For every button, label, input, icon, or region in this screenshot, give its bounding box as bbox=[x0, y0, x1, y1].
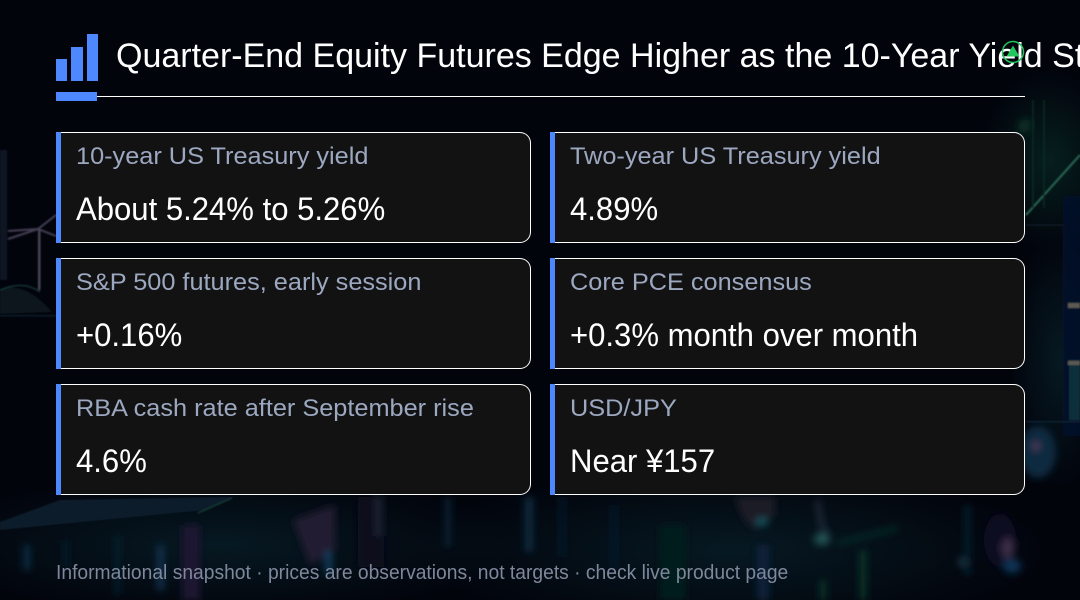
icon: green up triangle badge bbox=[1002, 40, 1024, 64]
roof lower left bbox=[0, 497, 232, 530]
panel: S&P 500 futures: S&P 500 futures, early session bbox=[76, 269, 421, 296]
panel: RBA cash rate: 4.6% bbox=[76, 443, 147, 479]
panel: Two-year US Treasury yield bbox=[550, 132, 1025, 243]
panel: RBA cash rate bbox=[56, 384, 531, 495]
right scene bbox=[1026, 155, 1080, 215]
panel: S&P 500 futures: +0.16% bbox=[76, 317, 182, 353]
panel: 10-year US Treasury yield bbox=[56, 132, 531, 243]
panel: USD/JPY: Near ¥157 bbox=[570, 443, 715, 479]
footer note: Informational snapshot · prices are observations, not targets · check live product page bbox=[56, 562, 788, 584]
panel: Core PCE consensus: +0.3% month over month bbox=[570, 317, 918, 353]
panel: RBA cash rate: RBA cash rate after September rise bbox=[76, 395, 474, 422]
panel: Two-year US Treasury yield: Two-year US Treasury yield bbox=[570, 143, 881, 170]
panel: Two-year US Treasury yield: 4.89% bbox=[570, 191, 658, 227]
left scene bbox=[0, 150, 7, 280]
panel: USD/JPY: USD/JPY bbox=[570, 395, 677, 422]
panel: USD/JPY bbox=[550, 384, 1025, 495]
panel: 10-year US Treasury yield: 10-year US Treasury yield bbox=[76, 143, 368, 170]
panel: 10-year US Treasury yield: About 5.24% to 5.26% bbox=[76, 191, 385, 227]
panel: Core PCE consensus: Core PCE consensus bbox=[570, 269, 812, 296]
title: Quarter-End Equity Futures Edge Higher as the 10-Year Yield St bbox=[116, 37, 1080, 75]
title rule bbox=[56, 92, 1025, 101]
icon: bar chart logo bbox=[56, 34, 98, 81]
panel: S&P 500 futures bbox=[56, 258, 531, 369]
panel: Core PCE consensus bbox=[550, 258, 1025, 369]
